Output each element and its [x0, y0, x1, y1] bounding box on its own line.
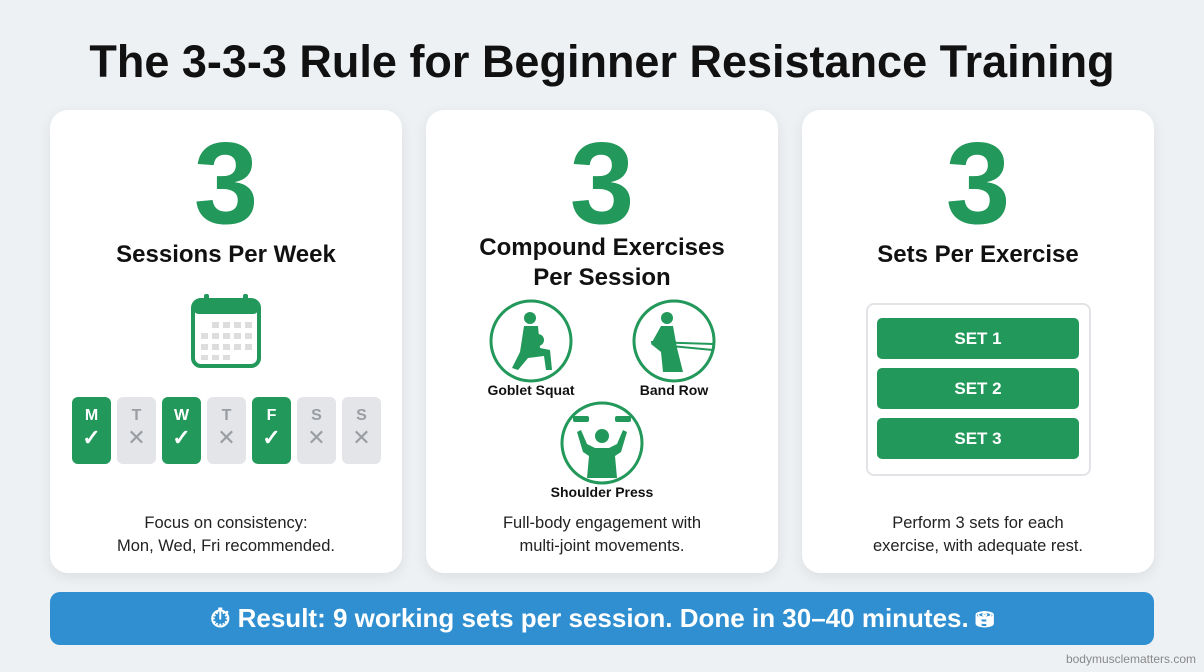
text sets: Perform 3 sets for each [892, 514, 1064, 532]
text sets [873, 514, 1083, 555]
text exercises [503, 514, 701, 555]
text sessions [117, 514, 335, 555]
heading exercises: Compound Exercises [479, 234, 725, 261]
number 3 exercises: 3 [570, 118, 634, 248]
footer url: bodymusclematters.com [1066, 652, 1196, 666]
icon: shoulder press [560, 402, 644, 484]
day tiles: F [267, 407, 276, 424]
day tiles: ✕ [307, 425, 326, 450]
heading exercises: Per Session [533, 264, 671, 291]
heading sessions: Sessions Per Week [116, 241, 336, 268]
set 1: SET 1 [954, 329, 1002, 348]
set 2: SET 2 [954, 379, 1002, 398]
day tiles: ✓ [82, 425, 101, 450]
day tiles: S [356, 407, 367, 424]
result banner [50, 592, 1154, 645]
day tiles: ✕ [352, 425, 371, 450]
result banner: ⏱ Result: 9 working sets per session. Done in 30–40 minutes. ⛁ [210, 603, 994, 633]
icon: calendar [191, 294, 261, 368]
day tiles: T [222, 407, 231, 424]
panel: exercises [426, 110, 778, 573]
set 1 [877, 318, 1079, 359]
panel: sets [802, 110, 1154, 573]
label shoulder press: Shoulder Press [551, 484, 653, 500]
heading exercises [479, 234, 725, 291]
number 3 sessions: 3 [194, 118, 258, 248]
day tiles: S [311, 407, 322, 424]
text exercises: multi-joint movements. [519, 537, 685, 555]
day tiles: W [174, 407, 189, 424]
number 3 sets: 3 [946, 118, 1010, 248]
label band row: Band Row [640, 382, 708, 398]
day tiles: ✓ [262, 425, 281, 450]
label goblet squat: Goblet Squat [487, 382, 575, 398]
day tiles: ✕ [217, 425, 236, 450]
icon: band row [632, 300, 716, 382]
set 3 [877, 418, 1079, 459]
day tiles: ✕ [127, 425, 146, 450]
sets box [866, 303, 1091, 476]
set 2 [877, 368, 1079, 409]
title: The 3-3-3 Rule for Beginner Resistance Training [89, 36, 1115, 87]
heading sets: Sets Per Exercise [877, 241, 1079, 268]
text sessions: Focus on consistency: [144, 514, 308, 532]
text exercises: Full-body engagement with [503, 514, 701, 532]
day tiles: ✓ [172, 425, 191, 450]
day tiles: T [132, 407, 141, 424]
day tiles [72, 397, 381, 464]
text sessions: Mon, Wed, Fri recommended. [117, 537, 335, 555]
panel: sessions [50, 110, 402, 573]
text sets: exercise, with adequate rest. [873, 537, 1083, 555]
set 3: SET 3 [954, 429, 1002, 448]
day tiles: M [85, 407, 98, 424]
icon: goblet squat [490, 300, 572, 382]
